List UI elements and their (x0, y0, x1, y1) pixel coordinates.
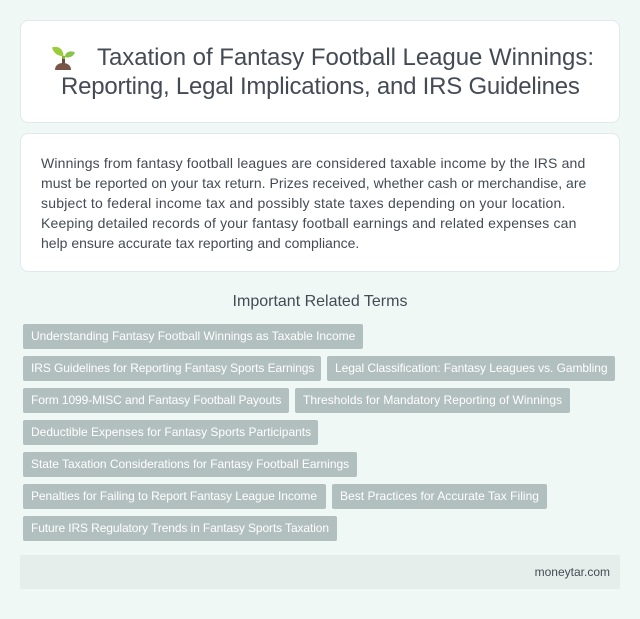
tag (23, 516, 337, 541)
panel: title card (20, 20, 620, 123)
tag (23, 420, 318, 445)
tag (23, 452, 357, 477)
title line 2: Reporting, Legal Implications, and IRS Guidelines (61, 73, 580, 100)
tags (23, 324, 615, 541)
tag (327, 356, 615, 381)
tag: Understanding Fantasy Football Winnings as Taxable Income (31, 329, 355, 343)
summary text: Keeping detailed records of your fantasy football earnings and related expenses can (41, 215, 577, 231)
tag (23, 388, 289, 413)
summary text: subject to federal income tax and possibly state taxes depending on your location. (41, 195, 566, 211)
tag: Thresholds for Mandatory Reporting of Winnings (303, 393, 562, 407)
summary text: must be reported on your tax return. Prizes received, whether cash or merchandise, are (41, 175, 586, 191)
tag (332, 484, 547, 509)
tag: IRS Guidelines for Reporting Fantasy Sports Earnings (31, 361, 314, 375)
title line 1: Taxation of Fantasy Football League Winnings: (97, 44, 594, 71)
tag (23, 484, 326, 509)
summary text: Winnings from fantasy football leagues are considered taxable income by the IRS and (41, 155, 585, 171)
tag (23, 324, 363, 349)
tag: Penalties for Failing to Report Fantasy League Income (31, 489, 317, 503)
tag (23, 356, 321, 381)
tag: Future IRS Regulatory Trends in Fantasy Sports Taxation (31, 521, 329, 535)
summary text (41, 155, 586, 251)
tag: Legal Classification: Fantasy Leagues vs. Gambling (335, 361, 607, 375)
tag: Best Practices for Accurate Tax Filing (340, 489, 539, 503)
tag: Deductible Expenses for Fantasy Sports Participants (31, 425, 311, 439)
tag: State Taxation Considerations for Fantasy Football Earnings (31, 457, 349, 471)
heading: related terms: Important Related Terms (233, 293, 407, 310)
summary text: help ensure accurate tax reporting and compliance. (41, 235, 359, 251)
tag (295, 388, 570, 413)
footer bar (20, 555, 620, 589)
tag: Form 1099-MISC and Fantasy Football Payouts (31, 393, 281, 407)
footer text: moneytar.com (535, 565, 610, 579)
panel: summary card (20, 133, 620, 272)
icon: sprout (52, 46, 75, 70)
